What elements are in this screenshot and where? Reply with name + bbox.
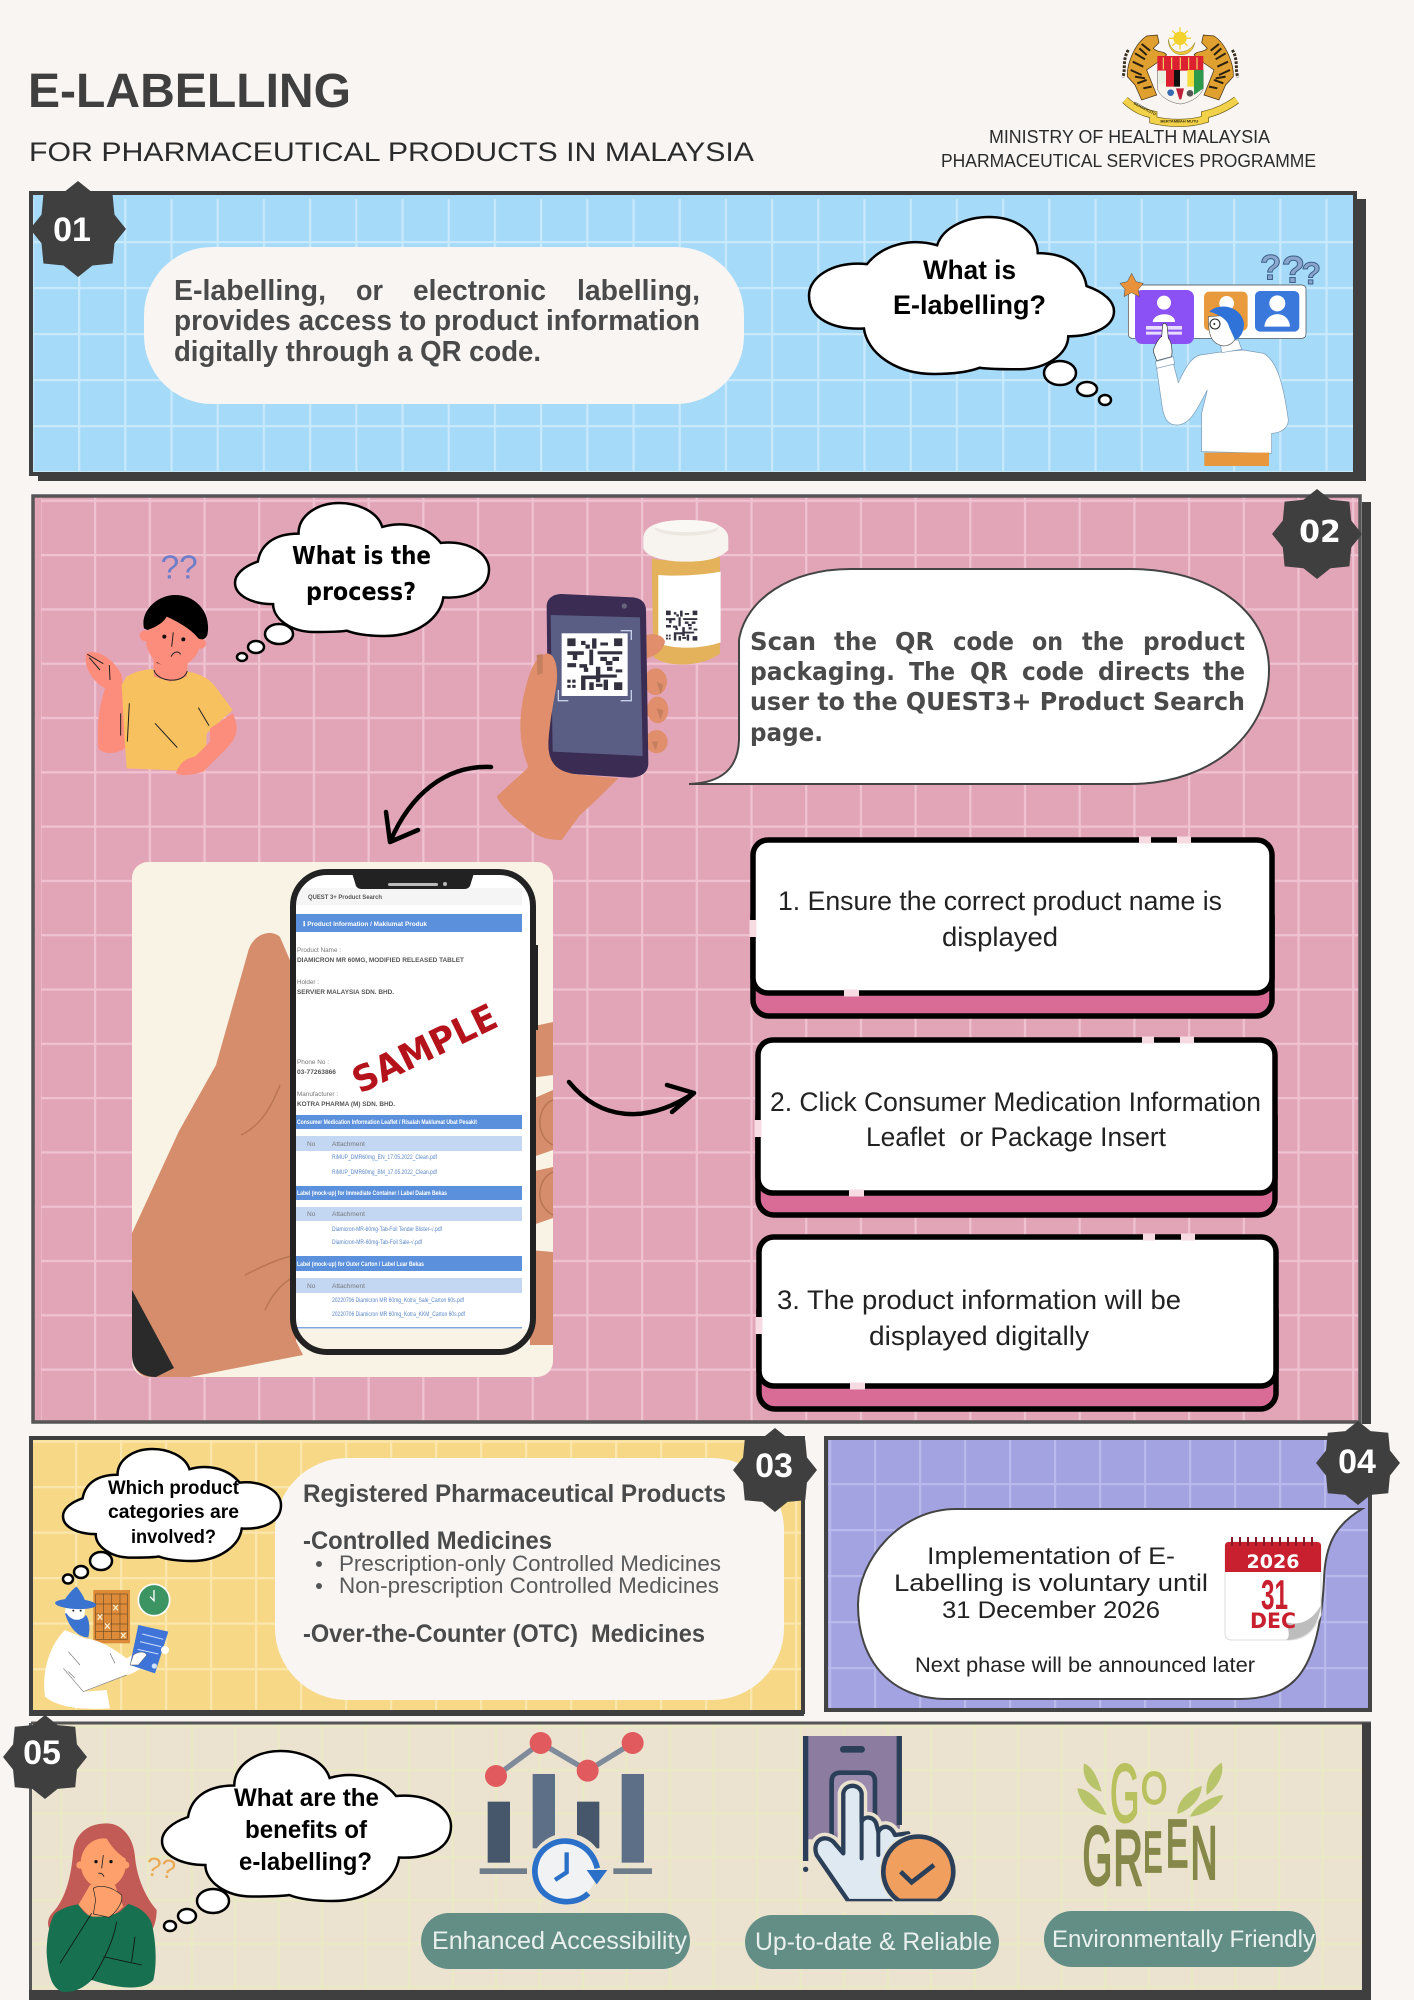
speech bubble: scan QR: product bbox=[1143, 627, 1245, 656]
phone frame and screen: Attachment bbox=[332, 1141, 365, 1148]
title: E-LABELLING bbox=[28, 65, 351, 118]
illustration: person selecting profile: ? bbox=[1282, 249, 1305, 292]
speech bubble: scan QR: packaging. bbox=[750, 657, 895, 686]
speech bubble: timeline bbox=[858, 1509, 1362, 1699]
illustration: thinking woman bbox=[47, 1823, 178, 1992]
thought cloud: what is e-labelling: E-labelling? bbox=[893, 290, 1046, 320]
phone frame and screen: Manufacturer : bbox=[297, 1091, 338, 1098]
phone frame and screen: ℹ Product Information / Maklumat Produk bbox=[303, 920, 427, 928]
arrow: phone to steps bbox=[569, 1082, 694, 1114]
step 1 bbox=[753, 840, 1272, 1016]
definition pill: digitally through a QR code. bbox=[174, 336, 541, 368]
speech bubble: scan QR: QR bbox=[895, 627, 934, 656]
phone frame and screen: No bbox=[307, 1283, 316, 1290]
icon: calendar: DEC bbox=[1250, 1609, 1296, 1633]
speech bubble: scan QR: the bbox=[1082, 627, 1124, 656]
phone frame and screen: RiMUP_DMR60mg_EN_17.05.2022_Clean.pdf bbox=[332, 1155, 437, 1161]
phone frame and screen: 03-77263866 bbox=[297, 1069, 336, 1076]
phone frame and screen: Attachment bbox=[332, 1211, 365, 1218]
pill: environmentally friendly: Environmentally Friendly bbox=[1052, 1926, 1315, 1953]
categories pill: Registered Pharmaceutical Products bbox=[303, 1480, 726, 1508]
icon: calendar: 2026 bbox=[1247, 1551, 1299, 1573]
phone frame and screen: Product Name : bbox=[297, 947, 341, 954]
badge 04: 04 bbox=[1338, 1443, 1376, 1481]
thought cloud: what is e-labelling bbox=[809, 217, 1114, 405]
badge 05 bbox=[3, 1715, 87, 1799]
speech bubble: timeline: 31 December 2026 bbox=[942, 1597, 1160, 1624]
panel 05: benefits bbox=[3, 1715, 1371, 2000]
panel 01: what is e-labelling bbox=[30, 181, 1366, 481]
definition pill: electronic bbox=[413, 275, 546, 307]
speech bubble: timeline: Next phase will be announced later bbox=[915, 1654, 1255, 1677]
icon: go green lettering: G bbox=[1110, 1747, 1140, 1840]
phone frame and screen: DIAMICRON MR 60MG, MODIFIED RELEASED TABLET bbox=[297, 957, 464, 964]
thought cloud: benefits: benefits of bbox=[245, 1816, 368, 1844]
step 3: 3. The product information will be bbox=[777, 1285, 1181, 1315]
illustration: man with document bbox=[44, 1584, 170, 1709]
phone frame and screen: Consumer Medication Information Leaflet / Risalah Maklumat Ubat Pesakit bbox=[297, 1119, 478, 1126]
icon: go green lettering bbox=[1077, 1747, 1223, 1903]
speech bubble: scan QR: page. bbox=[750, 718, 823, 747]
illustration: confused boy bbox=[86, 549, 237, 775]
pill: up-to-date and reliable: Up-to-date & Reliable bbox=[755, 1928, 992, 1956]
phone frame and screen: KOTRA PHARMA (M) SDN. BHD. bbox=[297, 1101, 395, 1108]
phone frame and screen: QUEST 3+ Product Search bbox=[308, 894, 382, 901]
illustration: confused boy: ?? bbox=[161, 549, 198, 586]
hand holding phone bbox=[132, 933, 553, 1377]
phone frame and screen: No bbox=[307, 1141, 316, 1148]
step 2: 2. Click Consumer Medication Information bbox=[770, 1087, 1261, 1117]
ministry text: PHARMACEUTICAL SERVICES PROGRAMME bbox=[941, 151, 1316, 171]
speech bubble: scan QR bbox=[689, 569, 1269, 784]
phone mockup card bbox=[132, 862, 553, 1377]
phone frame and screen: Diamicron-MR-60mg-Tab-Foil Tender Blister-√.pdf bbox=[332, 1226, 442, 1233]
thought cloud: what is e-labelling: What is bbox=[923, 255, 1016, 285]
speech bubble: scan QR: code bbox=[953, 627, 1014, 656]
icon: Malaysian coat of arms: BERSEKUTU bbox=[1133, 100, 1157, 117]
step 1: displayed bbox=[942, 922, 1058, 952]
speech bubble: scan QR: directs bbox=[1098, 657, 1190, 686]
badge 05: 05 bbox=[23, 1734, 61, 1772]
thought cloud: benefits bbox=[162, 1751, 451, 1931]
thought cloud: process: process? bbox=[306, 577, 416, 606]
badge 02: 02 bbox=[1299, 515, 1341, 550]
sample watermark: SAMPLE bbox=[346, 997, 504, 1102]
speech bubble: scan QR: the bbox=[1203, 657, 1245, 686]
pill: enhanced accessibility bbox=[421, 1913, 690, 1969]
illustration: hand scanning QR on medicine bottle bbox=[497, 520, 728, 840]
phone frame and screen: 20220706 Diamicron MR 60mg_Kotra_Sale_Carton 60s.pdf bbox=[332, 1298, 464, 1304]
panel 03: product categories bbox=[29, 1428, 817, 1716]
definition pill bbox=[144, 247, 744, 404]
icon: go green lettering: E bbox=[1143, 1821, 1162, 1884]
icon: go green lettering: G bbox=[1083, 1809, 1112, 1902]
phone frame and screen: RiMUP_DMR60mg_BM_17.05.2022_Clean.pdf bbox=[332, 1170, 437, 1176]
thought cloud: process: What is the bbox=[292, 541, 431, 570]
speech bubble: scan QR: The bbox=[909, 657, 955, 686]
phone frame and screen: Attachment bbox=[332, 1283, 365, 1290]
phone frame and screen bbox=[293, 872, 538, 1352]
pill: environmentally friendly bbox=[1044, 1911, 1316, 1967]
pill: up-to-date and reliable bbox=[745, 1915, 999, 1969]
categories pill: Prescription-only Controlled Medicines bbox=[339, 1551, 721, 1576]
speech bubble: scan QR: QR bbox=[970, 657, 1008, 686]
speech bubble: scan QR: Scan bbox=[750, 627, 816, 656]
phone frame and screen: Diamicron-MR-60mg-Tab-Foil Sale-√.pdf bbox=[332, 1239, 422, 1246]
badge 04 bbox=[1316, 1421, 1400, 1505]
speech bubble: timeline: Implementation of E- bbox=[927, 1543, 1175, 1570]
definition pill: provides access to product information bbox=[174, 305, 700, 337]
phone frame and screen: 20220706 Diamicron MR 60mg_Kotra_KKM_Carton 60s.pdf bbox=[332, 1312, 465, 1318]
badge 03: 03 bbox=[755, 1447, 793, 1485]
illustration: person selecting profile bbox=[1120, 248, 1321, 466]
badge 01 bbox=[30, 181, 126, 277]
arrow: scan to phone bbox=[386, 767, 491, 842]
phone frame and screen: Label (mock-up) for Immediate Container / Label Dalam Bekas bbox=[297, 1190, 447, 1197]
illustration: thinking woman: ?? bbox=[144, 1851, 178, 1885]
thought cloud: process bbox=[235, 503, 489, 661]
categories pill: -Controlled Medicines bbox=[303, 1527, 552, 1555]
categories pill: Non-prescription Controlled Medicines bbox=[339, 1573, 719, 1598]
icon: go green lettering: E bbox=[1166, 1807, 1188, 1882]
badge 01: 01 bbox=[53, 211, 91, 249]
phone frame and screen: No bbox=[307, 1211, 316, 1218]
thought cloud: benefits: What are the bbox=[234, 1784, 379, 1812]
speech bubble: scan QR: code bbox=[1022, 657, 1084, 686]
thought cloud: benefits: e-labelling? bbox=[239, 1848, 372, 1876]
icon: Malaysian coat of arms: BERTAMBAH MUTU bbox=[1160, 118, 1198, 123]
step 3: displayed digitally bbox=[869, 1321, 1090, 1351]
phone frame and screen: Phone No : bbox=[297, 1059, 329, 1066]
phone frame and screen: Label (mock-up) for Outer Carton / Label Luar Bekas bbox=[297, 1261, 424, 1268]
speech bubble: scan QR: user to the QUEST3+ Product Search bbox=[750, 687, 1245, 716]
illustration: person selecting profile: ? bbox=[1260, 248, 1281, 287]
illustration: person selecting profile: ? bbox=[1302, 255, 1321, 291]
icon: chart with clock bbox=[480, 1732, 652, 1908]
definition pill: E-labelling, bbox=[174, 275, 326, 307]
badge 02 bbox=[1272, 489, 1362, 579]
icon: calendar bbox=[1225, 1537, 1321, 1640]
ministry text: MINISTRY OF HEALTH MALAYSIA bbox=[989, 127, 1270, 147]
icon: calendar: 31 bbox=[1261, 1571, 1288, 1618]
panel 04: implementation bbox=[826, 1421, 1400, 1710]
icon: go green lettering: R bbox=[1113, 1815, 1143, 1903]
definition pill: or bbox=[356, 275, 383, 307]
thought cloud: categories: categories are bbox=[108, 1502, 239, 1523]
speech bubble: scan QR: on bbox=[1032, 627, 1063, 656]
icon: tap and check bbox=[803, 1736, 957, 1911]
step 2: Leaflet or Package Insert bbox=[866, 1122, 1166, 1152]
step 2 bbox=[758, 1040, 1275, 1215]
icon: go green lettering: O bbox=[1141, 1764, 1167, 1814]
phone frame and screen: Holder : bbox=[297, 979, 319, 986]
ministry text bbox=[941, 127, 1316, 171]
step 1: 1. Ensure the correct product name is bbox=[778, 886, 1222, 916]
categories pill: -Over-the-Counter (OTC) Medicines bbox=[303, 1620, 705, 1648]
step 3 bbox=[759, 1237, 1276, 1409]
speech bubble: scan QR: the bbox=[834, 627, 877, 656]
icon: Malaysian coat of arms bbox=[1123, 27, 1238, 123]
thought cloud: categories: involved? bbox=[131, 1527, 216, 1548]
subtitle: FOR PHARMACEUTICAL PRODUCTS IN MALAYSIA bbox=[29, 137, 754, 167]
phone frame and screen: SERVIER MALAYSIA SDN. BHD. bbox=[297, 989, 394, 996]
speech bubble: timeline: Labelling is voluntary until bbox=[894, 1570, 1208, 1597]
thought cloud: categories bbox=[63, 1449, 281, 1584]
thought cloud: categories: Which product bbox=[108, 1478, 240, 1499]
panel 02: process bbox=[33, 489, 1371, 1424]
icon: go green lettering: N bbox=[1191, 1813, 1217, 1895]
pill: enhanced accessibility: Enhanced Accessibility bbox=[432, 1927, 687, 1955]
categories pill bbox=[275, 1458, 784, 1700]
definition pill: labelling, bbox=[577, 275, 700, 307]
badge 03 bbox=[733, 1428, 817, 1512]
